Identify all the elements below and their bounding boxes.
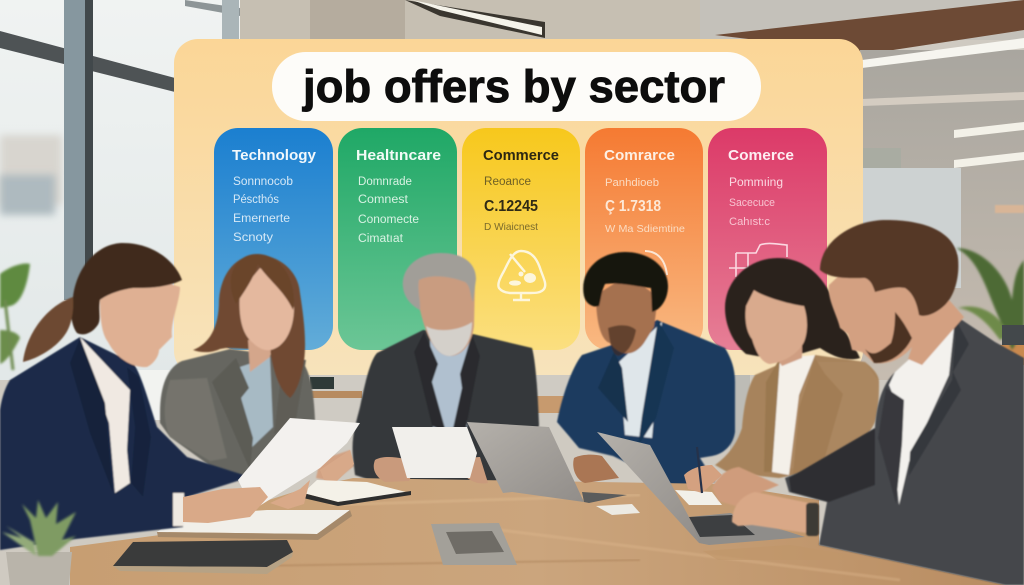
panel: technology card: Scnoty xyxy=(233,232,273,244)
panel: comerce card: Pommıing xyxy=(729,177,783,189)
paper held by man xyxy=(392,427,477,478)
panel: comerce card xyxy=(708,128,827,350)
panel: healthcare card: Domnrade xyxy=(358,176,412,188)
panel: commarce card: Comrarce xyxy=(604,147,675,164)
panel: commarce card xyxy=(585,128,703,350)
hand: woman grey-blazer xyxy=(320,450,354,482)
icon: building outline xyxy=(729,243,787,277)
table xyxy=(70,422,1005,585)
curly hair xyxy=(725,258,860,360)
person: grey-haired man xyxy=(353,253,539,487)
panel: technology card: Sonnnocob xyxy=(233,176,293,188)
panel: technology card xyxy=(214,128,333,350)
plant behind xyxy=(0,263,30,370)
person: grey-blazer woman xyxy=(160,254,354,482)
panel: commerce card xyxy=(462,128,580,350)
curly hair xyxy=(820,220,958,316)
laptop centre xyxy=(467,422,627,503)
woman's hands xyxy=(183,480,310,523)
icon: tree with hand xyxy=(498,251,545,300)
panel: commerce card: Commerce xyxy=(483,147,559,164)
curly hair xyxy=(583,252,668,312)
panel: commarce card: W Ma Sdiemtine xyxy=(605,223,685,235)
panel: technology card: Technology xyxy=(232,147,317,164)
panel: healthcare card xyxy=(338,128,457,350)
panel: presentation board xyxy=(174,39,863,375)
paper on table xyxy=(675,490,722,505)
clipboard xyxy=(157,510,352,540)
paper held by woman xyxy=(238,418,360,510)
binder xyxy=(303,480,411,506)
man's hands xyxy=(374,457,417,482)
title: job offers by sector xyxy=(302,61,725,112)
panel: comerce card: Comerce xyxy=(728,147,794,164)
panel: healthcare card: Conomecte xyxy=(358,214,419,226)
plant right xyxy=(956,248,1024,350)
woman's hand and pen xyxy=(684,447,722,493)
panel: technology card: Péscthós xyxy=(233,194,279,206)
laptop right xyxy=(597,432,805,545)
panel: healthcare card: Cimatıat xyxy=(358,233,404,245)
cable port xyxy=(431,523,517,565)
panel: commerce card: C.12245 xyxy=(484,198,538,215)
panel: commerce card: D Wiaicnest xyxy=(484,221,538,233)
person: navy-blazer man xyxy=(557,252,735,486)
panel: healthcare card: Healtıncare xyxy=(356,147,441,164)
panel: healthcare card: Comnest xyxy=(358,194,409,206)
panel: commarce card: Ç 1.7318 xyxy=(605,198,661,215)
person: tan-blazer woman xyxy=(715,258,879,478)
panel: technology card: Emernerte xyxy=(233,213,290,225)
hands on keyboard xyxy=(712,467,779,507)
plant in pot xyxy=(2,500,76,585)
person: left woman xyxy=(0,243,250,550)
panel: comerce card: Sacecuce xyxy=(729,197,775,209)
panel: commarce card: Panhdioeb xyxy=(605,177,659,189)
panel: commerce card: Reoance xyxy=(484,176,531,188)
person: right man xyxy=(712,220,1024,585)
navy man's hands xyxy=(573,455,619,483)
panel: comerce card: Cahıst:c xyxy=(729,216,770,228)
notebook xyxy=(113,540,293,574)
title xyxy=(272,52,761,121)
